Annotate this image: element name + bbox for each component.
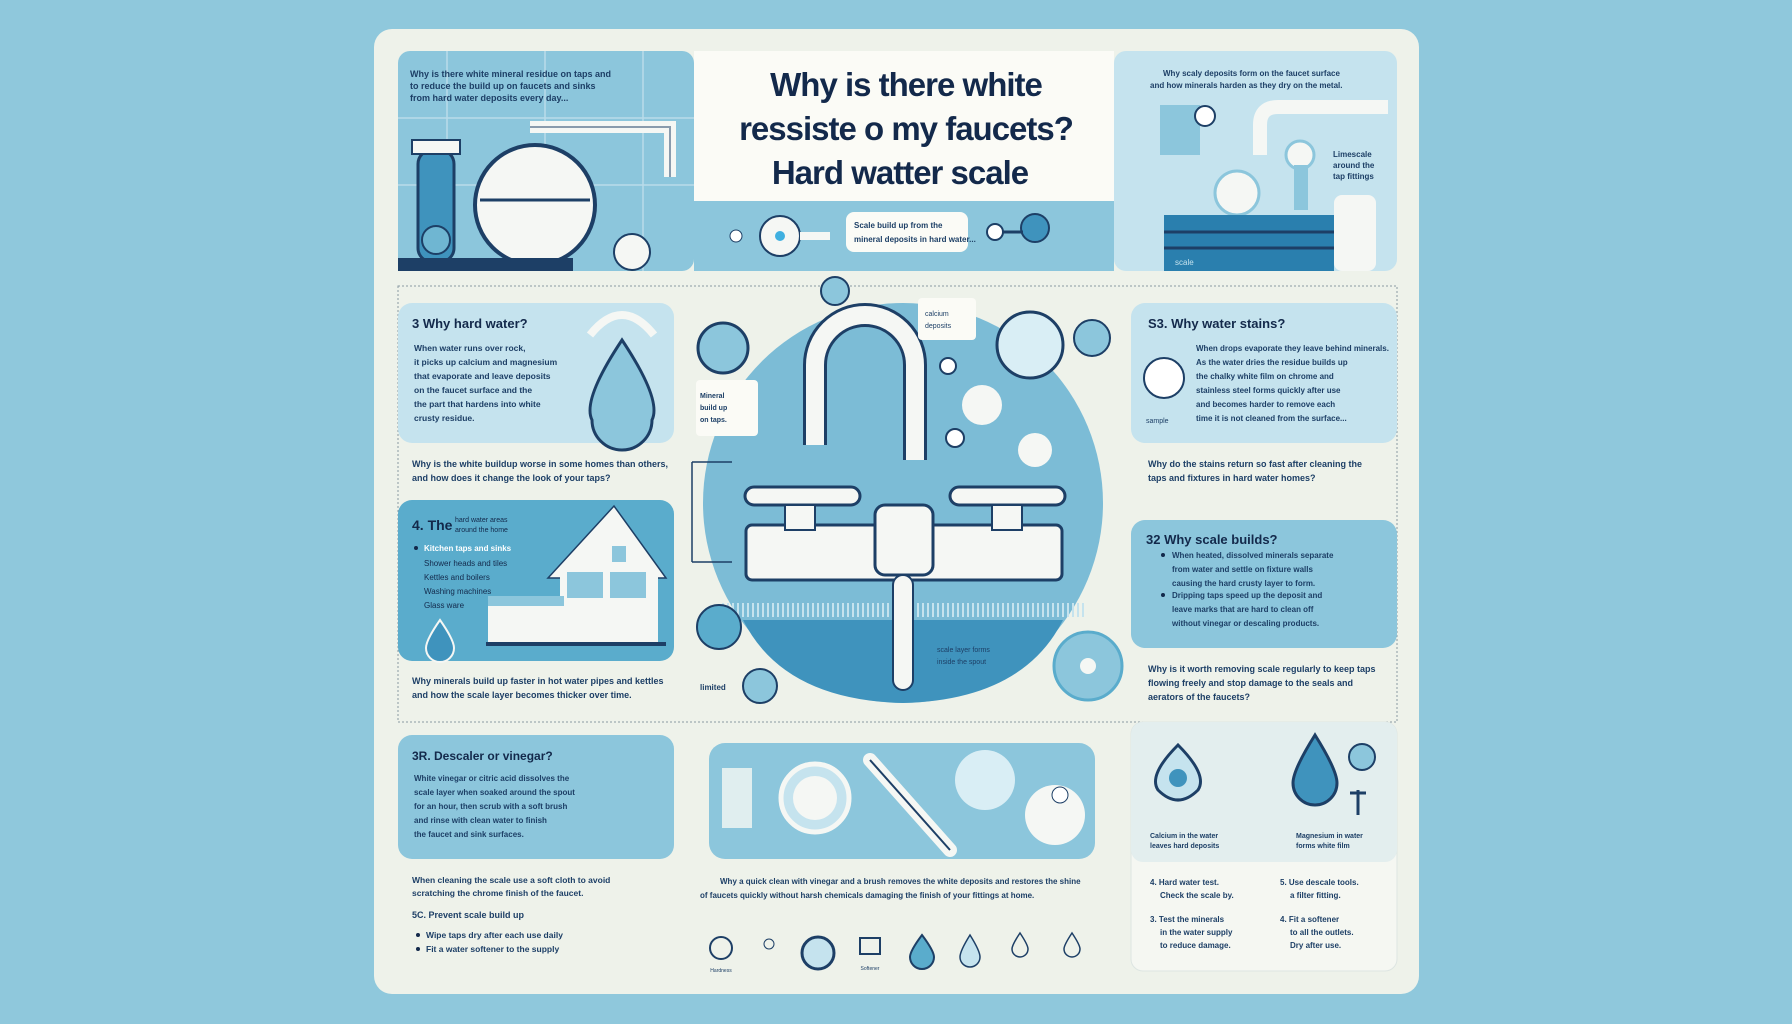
panel: 3R descaler bottom left bbox=[398, 735, 674, 859]
panel: bottom right tips: leaves hard deposits bbox=[1150, 843, 1219, 850]
panel: section 4 home: Shower heads and tiles bbox=[424, 559, 507, 568]
panel: section 4 home: 4. The bbox=[412, 517, 453, 533]
title: ressiste o my faucets? bbox=[739, 110, 1073, 147]
text block: right lower: aerators of the faucets? bbox=[1148, 692, 1250, 702]
panel: top right illustration: around the bbox=[1333, 161, 1375, 170]
panel: top left illustration: Why is there white mineral residue on taps and bbox=[410, 69, 611, 79]
panel: top right illustration: and how minerals harden as they dry on the metal. bbox=[1150, 81, 1342, 90]
panel: section 4 home: around the home bbox=[455, 527, 508, 534]
panel: section S3 right top: stainless steel forms quickly after use bbox=[1196, 386, 1341, 395]
panel: bottom right tips: 4. Hard water test. bbox=[1150, 878, 1219, 887]
panel: section 3 cause (left): 3 Why hard water? bbox=[412, 316, 528, 331]
panel: section 4 home: Washing machines bbox=[424, 587, 491, 596]
panel: top left illustration: from hard water deposits every day... bbox=[410, 93, 568, 103]
panel: section S3 right top: When drops evaporate they leave behind minerals. bbox=[1196, 344, 1389, 353]
text block: left middle: Why is the white buildup worse in some homes than others, bbox=[412, 459, 668, 469]
panel: title strip with pipe icons: Scale build up from the bbox=[854, 221, 943, 230]
panel: section 3 cause (left): it picks up calcium and magnesium bbox=[414, 357, 558, 367]
panel: section S3 right top bbox=[1131, 303, 1397, 443]
panel: 3R descaler bottom left: for an hour, then scrub with a soft brush bbox=[414, 802, 567, 811]
title: Why is there white bbox=[770, 66, 1043, 103]
panel: section 3 cause (left) bbox=[398, 303, 674, 450]
text block: left lower: and how the scale layer becomes thicker over time. bbox=[412, 690, 632, 700]
central faucet illustration: deposits bbox=[925, 323, 952, 330]
panel: section 32 right: from water and settle on fixture walls bbox=[1172, 565, 1313, 574]
central faucet illustration: scale layer forms bbox=[937, 647, 990, 654]
panel: top right illustration: scale bbox=[1175, 258, 1194, 267]
text block: bottom left tips bbox=[412, 875, 610, 954]
text block: right lower: Why is it worth removing scale regularly to keep taps bbox=[1148, 664, 1376, 674]
panel: bottom right tips: 5. Use descale tools. bbox=[1280, 878, 1359, 887]
icon row: bottom center bbox=[710, 933, 1080, 974]
panel: bottom right tips bbox=[1131, 722, 1397, 971]
panel: 3R descaler bottom left: scale layer when soaked around the spout bbox=[414, 788, 575, 797]
panel: section 32 right: When heated, dissolved minerals separate bbox=[1172, 551, 1334, 560]
panel: title strip with pipe icons bbox=[694, 201, 1114, 271]
middle section dotted border bbox=[398, 286, 1397, 722]
central faucet illustration: calcium bbox=[925, 311, 949, 318]
central faucet illustration bbox=[692, 277, 1122, 703]
panel: bottom right tips: in the water supply bbox=[1160, 928, 1233, 937]
panel: bottom right tips: 3. Test the minerals bbox=[1150, 915, 1225, 924]
card background bbox=[374, 29, 1419, 994]
panel: section 3 cause (left): the part that hardens into white bbox=[414, 399, 541, 409]
text block: right lower: flowing freely and stop damage to the seals and bbox=[1148, 678, 1353, 688]
text block: left lower bbox=[412, 676, 664, 700]
panel: section S3 right top: As the water dries the residue builds up bbox=[1196, 358, 1348, 367]
panel: 3R descaler bottom left: and rinse with clean water to finish bbox=[414, 816, 547, 825]
panel: 3R descaler bottom left: the faucet and sink surfaces. bbox=[414, 830, 524, 839]
text block: bottom left tips: Wipe taps dry after each use daily bbox=[426, 930, 563, 940]
panel: bottom right tips: Check the scale by. bbox=[1160, 891, 1234, 900]
panel: bottom right tips: a filter fitting. bbox=[1290, 891, 1341, 900]
panel: section 32 right: causing the hard crusty layer to form. bbox=[1172, 579, 1315, 588]
panel: section 32 right bbox=[1131, 520, 1397, 648]
panel: section 32 right: without vinegar or descaling products. bbox=[1171, 619, 1319, 628]
panel: section 32 right: Dripping taps speed up the deposit and bbox=[1172, 591, 1322, 600]
central faucet illustration: inside the spout bbox=[937, 659, 986, 666]
text block: bottom center bbox=[700, 877, 1081, 900]
panel: 3R descaler bottom left: 3R. Descaler or vinegar? bbox=[412, 749, 553, 763]
panel: section 4 home: Kettles and boilers bbox=[424, 573, 490, 582]
panel: top left illustration: to reduce the build up on faucets and sinks bbox=[410, 81, 596, 91]
panel: top right illustration: Limescale bbox=[1333, 150, 1372, 159]
central faucet illustration: Mineral bbox=[700, 393, 725, 400]
panel: title strip with pipe icons: mineral deposits in hard water... bbox=[854, 235, 976, 244]
central faucet illustration: limited bbox=[700, 683, 726, 692]
panel: section 32 right: 32 Why scale builds? bbox=[1146, 532, 1278, 547]
text block: right lower bbox=[1148, 664, 1376, 702]
panel: section 4 home: Glass ware bbox=[424, 601, 465, 610]
text block: bottom center: Why a quick clean with vinegar and a brush removes the white deposits and restores the shine bbox=[720, 877, 1081, 886]
text block: bottom left tips: scratching the chrome finish of the faucet. bbox=[412, 888, 583, 898]
panel: top right illustration: tap fittings bbox=[1333, 172, 1374, 181]
panel: top right illustration bbox=[1114, 51, 1397, 271]
text block: left middle: and how does it change the look of your taps? bbox=[412, 473, 611, 483]
panel: section S3 right top: sample bbox=[1146, 418, 1169, 425]
panel: top left illustration bbox=[398, 51, 694, 271]
panel: section 3 cause (left): that evaporate and leave deposits bbox=[414, 371, 551, 381]
panel: bottom right tips: 4. Fit a softener bbox=[1280, 915, 1339, 924]
text block: right middle: taps and fixtures in hard water homes? bbox=[1148, 473, 1316, 483]
central faucet illustration: on taps. bbox=[700, 417, 727, 424]
faucet spout bbox=[815, 315, 915, 460]
panel: 3R descaler bottom left: White vinegar or citric acid dissolves the bbox=[414, 774, 570, 783]
text block: bottom left tips: Fit a water softener to the supply bbox=[426, 944, 559, 954]
text block: bottom center: of faucets quickly without harsh chemicals damaging the finish of your fittings at home. bbox=[700, 891, 1034, 900]
faucet body bbox=[746, 525, 1062, 580]
panel: section 4 home bbox=[398, 500, 674, 662]
icon: water drop bbox=[590, 340, 654, 450]
icon row: bottom center: Hardness bbox=[710, 968, 732, 974]
panel: section S3 right top: time it is not cleaned from the surface... bbox=[1196, 414, 1347, 423]
panel: tools illustration bottom center bbox=[709, 743, 1095, 859]
panel: bottom right tips: Dry after use. bbox=[1290, 941, 1341, 950]
text block: bottom left tips: When cleaning the scale use a soft cloth to avoid bbox=[412, 875, 610, 885]
icon: flask with tap bbox=[475, 145, 595, 265]
panel: bottom right tips: Calcium in the water bbox=[1150, 833, 1218, 840]
panel: section 3 cause (left): crusty residue. bbox=[414, 413, 474, 423]
panel: section 4 home: Kitchen taps and sinks bbox=[424, 544, 512, 553]
text block: right middle: Why do the stains return so fast after cleaning the bbox=[1148, 459, 1362, 469]
panel: bottom right tips: forms white film bbox=[1296, 843, 1350, 850]
panel: section S3 right top: and becomes harder to remove each bbox=[1196, 400, 1335, 409]
icon: house bbox=[486, 506, 666, 646]
icon row: bottom center: Softener bbox=[861, 966, 880, 972]
text block: bottom left tips: 5C. Prevent scale build up bbox=[412, 910, 525, 920]
panel: section S3 right top: the chalky white film on chrome and bbox=[1196, 372, 1334, 381]
panel: section S3 right top: S3. Why water stains? bbox=[1148, 316, 1285, 331]
text block: left lower: Why minerals build up faster in hot water pipes and kettles bbox=[412, 676, 664, 686]
panel: section 3 cause (left): When water runs over rock, bbox=[414, 343, 525, 353]
panel: bottom right tips: Magnesium in water bbox=[1296, 833, 1363, 840]
central faucet illustration: build up bbox=[700, 405, 727, 412]
panel: section 32 right: leave marks that are hard to clean off bbox=[1172, 605, 1314, 614]
panel: section 4 home: hard water areas bbox=[455, 517, 508, 524]
title: Hard watter scale bbox=[772, 154, 1029, 191]
panel: bottom right tips: to reduce damage. bbox=[1160, 941, 1231, 950]
text block: left middle bbox=[412, 459, 668, 483]
title bbox=[694, 51, 1114, 201]
panel: bottom right tips: to all the outlets. bbox=[1290, 928, 1354, 937]
panel: top right illustration: Why scaly deposits form on the faucet surface bbox=[1163, 69, 1340, 78]
panel: section 3 cause (left): on the faucet surface and the bbox=[414, 385, 532, 395]
text block: right middle bbox=[1148, 459, 1362, 483]
icon: test tube bbox=[418, 150, 454, 262]
bubbles & callouts bbox=[997, 312, 1063, 378]
